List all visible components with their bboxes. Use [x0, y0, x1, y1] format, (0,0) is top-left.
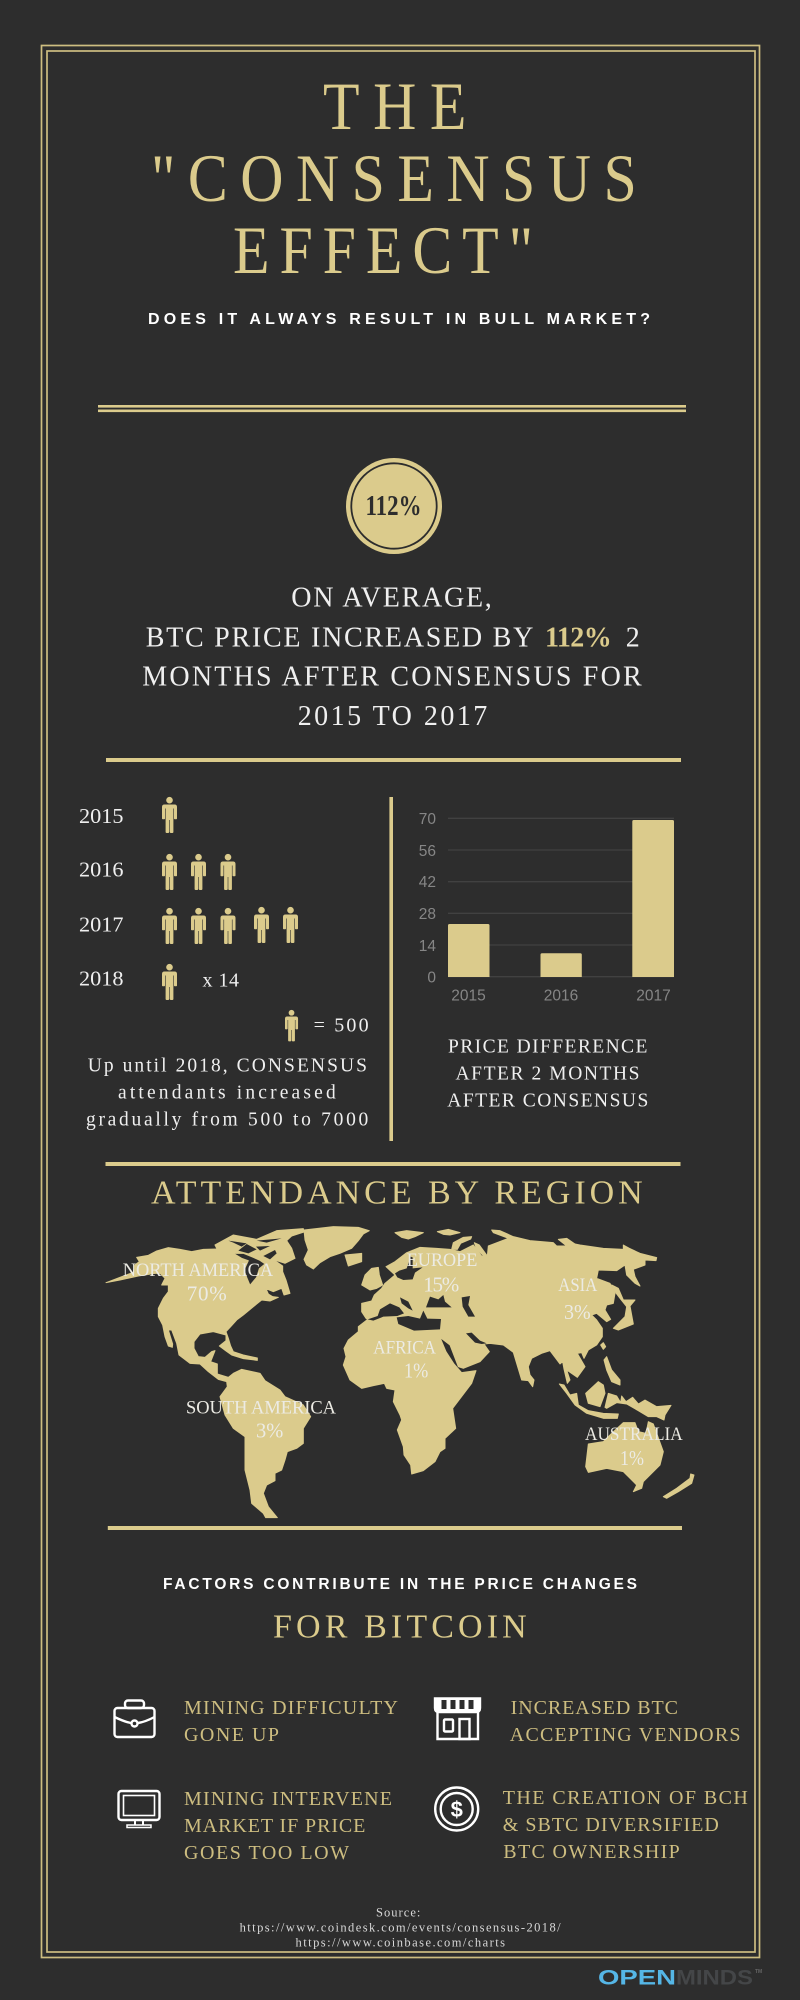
- divider: [106, 1162, 680, 1166]
- logo: openminds: OPEN: [598, 1966, 676, 1990]
- heading: for bitcoin: FOR BITCOIN: [273, 1608, 527, 1645]
- label: africa: [373, 1338, 437, 1382]
- y axis labels: [419, 811, 436, 987]
- y axis labels: 42: [419, 874, 436, 891]
- y axis labels: 0: [427, 970, 436, 987]
- label: north america: [123, 1261, 274, 1306]
- badge: 112%: [346, 458, 442, 554]
- double divider: [98, 405, 686, 412]
- badge: 112%: 112%: [366, 491, 422, 522]
- chart caption: AFTER CONSENSUS: [447, 1090, 648, 1111]
- vertical divider: [389, 797, 393, 1141]
- subtitle: DOES IT ALWAYS RESULT IN BULL MARKET?: [148, 311, 650, 328]
- factor: accepting vendors: [435, 1697, 740, 1746]
- chart caption: AFTER 2 MONTHS: [456, 1063, 640, 1084]
- label: africa: AFRICA: [373, 1338, 437, 1358]
- inland seas: [368, 1257, 487, 1344]
- legend: one person equals 500: = 500: [314, 1015, 369, 1037]
- source text: https://www.coindesk.com/events/consensus-2018/: [240, 1921, 561, 1935]
- title: [151, 68, 637, 288]
- factor: mining intervene: MINING INTERVENE: [184, 1788, 392, 1810]
- heading: attendance by region: ATTENDANCE BY REGION: [151, 1174, 643, 1211]
- attendance caption: Up until 2018, CONSENSUS: [88, 1056, 367, 1077]
- label: north america: 70%: [187, 1282, 227, 1306]
- factor: mining intervene: GOES TOO LOW: [184, 1842, 349, 1864]
- americas and arctic: [106, 1227, 369, 1518]
- label: south america: 3%: [256, 1418, 283, 1442]
- factor: creation of BCH and SBTC: THE CREATION OF BCH: [503, 1787, 748, 1809]
- factor: creation of BCH and SBTC: & SBTC DIVERSIFIED: [503, 1814, 719, 1836]
- arctic channels: [228, 1238, 282, 1259]
- statement text: BTC PRICE INCREASED BY: [146, 623, 533, 654]
- region labels: [123, 1251, 683, 1470]
- year labels: [79, 804, 124, 991]
- icon: dollar coin: $: [451, 1797, 463, 1822]
- factor: creation of BCH and SBTC: [435, 1787, 748, 1863]
- label: australia: [585, 1425, 683, 1470]
- label: north america: NORTH AMERICA: [123, 1261, 274, 1281]
- year labels: 2016: [79, 858, 124, 882]
- multiplier: x 14: [202, 970, 239, 992]
- statement text: MONTHS AFTER CONSENSUS FOR: [142, 662, 642, 693]
- world map: [106, 1227, 694, 1518]
- legend: one person equals 500: [285, 1010, 369, 1041]
- divider: [108, 1526, 682, 1530]
- logo: openminds: [598, 1966, 762, 1990]
- x axis labels: 2015: [451, 988, 486, 1005]
- title: EFFECT": [233, 212, 533, 288]
- y axis labels: 56: [419, 843, 436, 860]
- factor: mining difficulty: [114, 1697, 398, 1746]
- logo: openminds: TM: [755, 1969, 762, 1975]
- person icons: [162, 797, 298, 1000]
- factor: mining difficulty: GONE UP: [184, 1724, 279, 1746]
- statement text: [142, 582, 642, 732]
- x axis labels: [451, 988, 671, 1005]
- label: australia: AUSTRALIA: [585, 1425, 683, 1445]
- label: europe: [407, 1251, 477, 1297]
- x axis labels: 2017: [636, 988, 671, 1005]
- statement text: 112%: [545, 623, 612, 654]
- label: asia: 3%: [564, 1300, 591, 1324]
- statement text: 2: [626, 623, 640, 654]
- source text: Source:: [376, 1906, 420, 1920]
- label: asia: ASIA: [558, 1276, 598, 1296]
- icon: dollar coin: [435, 1788, 478, 1830]
- pictogram: attendance by year: [79, 797, 369, 1041]
- label: south america: [186, 1398, 337, 1442]
- label: europe: EUROPE: [407, 1251, 477, 1271]
- europe, africa, asia, oceania: [343, 1229, 694, 1498]
- attendance caption: gradually from 500 to 7000: [86, 1110, 368, 1131]
- factor: mining intervene: [118, 1788, 392, 1864]
- chart caption: [447, 1036, 648, 1111]
- chart caption: PRICE DIFFERENCE: [448, 1036, 647, 1057]
- label: australia: 1%: [620, 1446, 644, 1470]
- factor: creation of BCH and SBTC: BTC OWNERSHIP: [503, 1841, 680, 1863]
- year labels: 2015: [79, 804, 124, 828]
- divider: [106, 758, 681, 762]
- attendance caption: [86, 1056, 368, 1131]
- title: THE: [323, 68, 466, 144]
- statement text: 2015 TO 2017: [298, 701, 487, 732]
- title: "CONSENSUS: [151, 140, 637, 216]
- y axis labels: 28: [419, 906, 436, 923]
- label: europe: 15%: [423, 1273, 459, 1297]
- bar chart: price difference: [419, 811, 674, 1005]
- y axis labels: 14: [419, 938, 436, 955]
- factor: accepting vendors: INCREASED BTC: [511, 1697, 678, 1719]
- label: asia: [558, 1276, 598, 1324]
- source text: [240, 1906, 561, 1950]
- icon: briefcase: [114, 1700, 154, 1737]
- source text: https://www.coinbase.com/charts: [296, 1936, 505, 1950]
- year labels: 2017: [79, 912, 124, 936]
- x axis labels: 2016: [544, 988, 578, 1005]
- statement text: ON AVERAGE,: [291, 582, 492, 613]
- icon: store: [435, 1698, 480, 1739]
- icon: monitor: [118, 1791, 160, 1828]
- factor: accepting vendors: ACCEPTING VENDORS: [510, 1724, 740, 1746]
- label: africa: 1%: [404, 1358, 428, 1382]
- factor: mining difficulty: MINING DIFFICULTY: [184, 1697, 398, 1719]
- label: south america: SOUTH AMERICA: [186, 1398, 337, 1418]
- factor: mining intervene: MARKET IF PRICE: [184, 1815, 365, 1837]
- bars: [448, 820, 674, 977]
- heading: factors: FACTORS CONTRIBUTE IN THE PRICE CHANGES: [163, 1576, 637, 1593]
- logo: openminds: MINDS: [676, 1966, 753, 1990]
- attendance caption: attendants increased: [118, 1083, 336, 1104]
- y axis labels: 70: [419, 811, 436, 828]
- year labels: 2018: [79, 967, 124, 991]
